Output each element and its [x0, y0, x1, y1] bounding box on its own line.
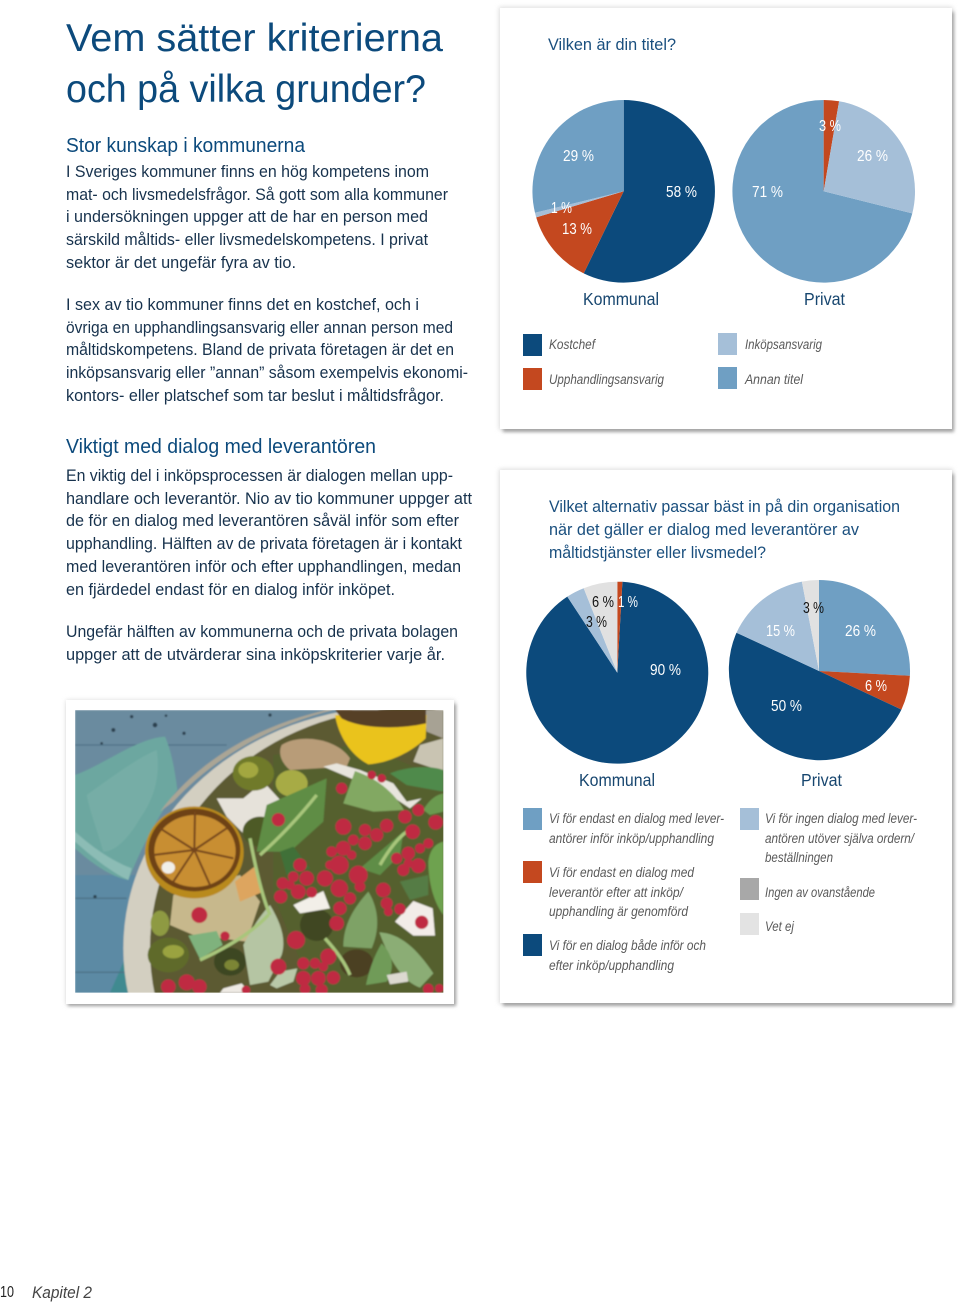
legend: titles: [523, 333, 822, 390]
text block: dialog med leverantören: [66, 467, 472, 599]
panel: Vilken är din titel?: [499, 7, 954, 432]
legend: dialog alternatives: Ingen av ovanstående: [765, 885, 875, 900]
text block: kommunernas kompetens: I Sveriges kommuner finns en hög kompetens inom: [66, 163, 429, 181]
legend: dialog alternatives: Vi för endast en dialog med: [549, 865, 694, 880]
legend: dialog alternatives: Vi för en dialog både inför och: [549, 938, 706, 953]
text block: kostchef och inköpsansvarig: [66, 296, 468, 405]
text block: dialog med leverantören: med leverantören inför och efter upphandlingen, medan: [66, 558, 461, 576]
pie chart: Privat: 71 %: [752, 184, 783, 201]
legend: titles: Inköpsansvarig: [745, 337, 822, 352]
legend: dialog alternatives: Vi för endast en dialog med lever-: [549, 811, 724, 826]
legend: dialog alternatives: antörer inför inköp/upphandling: [549, 831, 714, 846]
legend: dialog alternatives: leverantör efter att inköp/: [549, 885, 684, 900]
pie chart: Kommunal: [532, 100, 715, 283]
text block: kostchef och inköpsansvarig: kontors- eller platschef som tar beslut i måltidsfrågor.: [66, 387, 444, 405]
text block: utvärdering av inköpskriterier: Ungefär hälften av kommunerna och de privata bolagen: [66, 623, 458, 641]
legend: titles: Kostchef: [549, 337, 596, 352]
legend: dialog alternatives: [523, 808, 917, 973]
legend: dialog alternatives: antören utöver själva ordern/: [765, 831, 915, 846]
text block: dialog med leverantören: de för en dialog med leverantören såväl inför som efter: [66, 512, 459, 530]
text block: kommunernas kompetens: mat- och livsmedelsfrågor. Så gott som alla kommuner: [66, 186, 448, 204]
panel: Vilket alternativ passar bäst: [499, 469, 954, 1006]
pie chart: Privat: 26 %: [845, 623, 876, 640]
legend: titles: Upphandlingsansvarig: [549, 372, 664, 387]
pie chart: Privat: 15 %: [766, 623, 795, 640]
chart label: Kommunal: Kommunal: [579, 770, 655, 790]
title: och på vilka grunder?: [66, 68, 426, 111]
pie chart: Kommunal: 58 %: [666, 184, 697, 201]
text block: kommunernas kompetens: särskild måltids- eller livsmedelskompetens. I privat: [66, 231, 428, 249]
title: Vem sätter kriterierna: [66, 17, 443, 60]
text block: kostchef och inköpsansvarig: inköpsansvarig eller ”annan” såsom exempelvis ekonomi-: [66, 364, 468, 382]
panel heading: när det gäller er dialog med leverantörer av: [549, 521, 860, 539]
pie chart: Kommunal: 6 %: [592, 594, 614, 611]
pie chart: Privat: 3 %: [819, 118, 841, 135]
pie chart: Privat: 26 %: [857, 148, 888, 165]
text block: dialog med leverantören: en fjärdedel endast för en dialog inför inköpet.: [66, 581, 395, 599]
heading: Viktigt med dialog med leverantören: Viktigt med dialog med leverantören: [66, 436, 376, 458]
panel heading: [549, 498, 900, 562]
chapter label: Kapitel 2: [32, 1283, 92, 1302]
pie chart: Kommunal: 13 %: [562, 221, 592, 238]
legend: titles: Annan titel: [744, 372, 804, 387]
pie chart: Kommunal: [526, 582, 708, 764]
text block: utvärdering av inköpskriterier: [66, 623, 458, 664]
text block: dialog med leverantören: handlare och leverantör. Nio av tio kommuner uppger att: [66, 490, 472, 508]
heading: Stor kunskap i kommunerna: Stor kunskap i kommunerna: [66, 135, 306, 157]
panel heading: Vilken är din titel?: [548, 36, 676, 54]
pie chart: Privat: [729, 580, 910, 760]
legend: dialog alternatives: Vi för ingen dialog med lever-: [765, 811, 917, 826]
text block: kommunernas kompetens: i undersökningen uppger att de har en person med: [66, 208, 428, 226]
pie chart: Kommunal: 3 %: [586, 614, 607, 631]
pie chart: Privat: 3 %: [803, 600, 824, 617]
text block: dialog med leverantören: En viktig del i inköpsprocessen är dialogen mellan upp-: [66, 467, 453, 485]
pie chart: Kommunal: 1 %: [551, 200, 572, 217]
pie chart: Privat: 50 %: [771, 698, 802, 715]
chart label: Privat: Privat: [801, 770, 842, 790]
chart label: Kommunal: Kommunal: [583, 289, 659, 309]
pie chart: Privat: 6 %: [865, 678, 887, 695]
pie chart: Kommunal: 90 %: [650, 662, 681, 679]
text block: kostchef och inköpsansvarig: övriga en upphandlingsansvarig eller annan person med: [66, 319, 453, 337]
text block: dialog med leverantören: upphandling. Hälften av de privata företagen är i kontakt: [66, 535, 462, 553]
panel heading: måltidstjänster eller livsmedel?: [549, 544, 766, 562]
panel heading: Vilket alternativ passar bäst in på din organisation: [549, 498, 900, 516]
text block: kostchef och inköpsansvarig: I sex av tio kommuner finns det en kostchef, och i: [66, 296, 419, 314]
page number: 10: [0, 1284, 14, 1301]
legend: dialog alternatives: Vet ej: [765, 919, 795, 934]
legend: dialog alternatives: beställningen: [765, 850, 833, 865]
text block: kommunernas kompetens: sektor är det ungefär fyra av tio.: [66, 254, 296, 272]
photo: salad bowl with pomegranate and grilled lemon: [64, 698, 458, 1008]
pie chart: Kommunal: 1 %: [618, 594, 638, 611]
title: [66, 17, 443, 111]
legend: dialog alternatives: efter inköp/upphandling: [549, 958, 674, 973]
legend: dialog alternatives: upphandling är genomförd: [549, 904, 688, 919]
text block: utvärdering av inköpskriterier: uppger att de utvärderar sina inköpskriterier varje år.: [66, 646, 445, 664]
text block: kostchef och inköpsansvarig: måltidskompetens. Bland de privata företagen är det en: [66, 341, 454, 359]
pie chart: Kommunal: 29 %: [563, 148, 594, 165]
chart label: Privat: Privat: [804, 289, 845, 309]
pie chart: Privat: [732, 100, 915, 283]
text block: kommunernas kompetens: [66, 163, 448, 272]
